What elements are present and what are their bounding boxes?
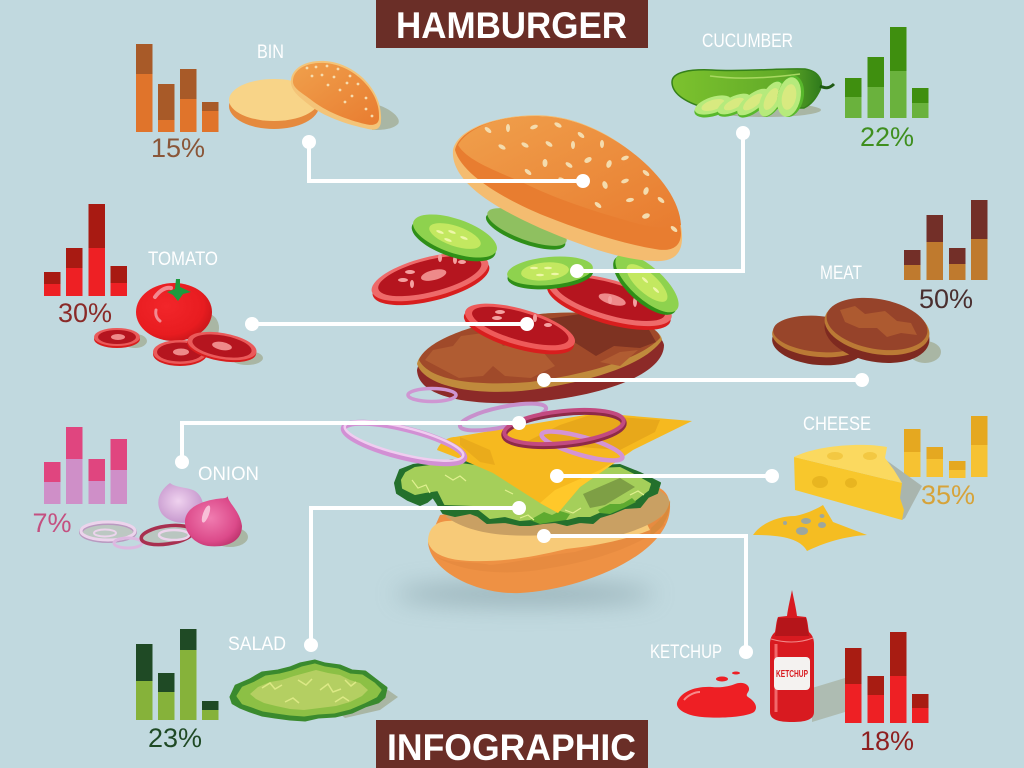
bun bar chart <box>136 44 218 132</box>
tomato percent: 30% <box>58 298 112 328</box>
icon: cucumber with slices <box>672 69 834 123</box>
meat bar chart <box>904 200 988 280</box>
panel: meat <box>770 200 988 371</box>
icon: tomato with slices <box>94 279 263 367</box>
icon: ketchup bottle: KETCHUP <box>776 669 808 680</box>
ketchup bar chart <box>845 632 928 723</box>
icon: ketchup bottle <box>770 590 845 722</box>
tomato slices <box>367 243 677 364</box>
bun percent: 15% <box>151 133 205 163</box>
icon: ketchup puddle <box>677 672 756 718</box>
panel: bun <box>136 42 399 163</box>
ketchup label: KETCHUP <box>650 642 722 663</box>
salad label: SALAD <box>228 634 286 655</box>
title: hamburger: HAMBURGER <box>396 5 627 46</box>
meat percent: 50% <box>919 284 973 314</box>
icon: salad leaf <box>231 661 398 720</box>
connector: bun <box>302 135 590 188</box>
connector: tomato <box>245 317 534 331</box>
icon: onions with rings <box>81 483 248 548</box>
ketchup percent: 18% <box>860 726 914 756</box>
bottom bun <box>428 480 670 593</box>
meat label: MEAT <box>820 263 862 284</box>
onion bar chart <box>44 427 127 504</box>
connector: cucumber <box>570 126 750 278</box>
panel: onion <box>32 427 259 548</box>
connector: salad <box>304 501 526 652</box>
cheese slice <box>437 413 692 513</box>
panel: salad <box>136 629 398 753</box>
top bun <box>453 115 682 261</box>
icon: meat patties <box>770 291 941 371</box>
cucumber percent: 22% <box>860 122 914 152</box>
onion percent: 7% <box>32 508 72 538</box>
burger shadow <box>395 583 655 605</box>
cucumber bar chart <box>845 27 928 118</box>
connector: meat <box>537 373 869 387</box>
meat patty <box>417 313 664 403</box>
onion label: ONION <box>198 464 259 485</box>
lettuce <box>395 460 660 525</box>
salad percent: 23% <box>148 723 202 753</box>
icon: cheese wedge and slice <box>753 445 922 551</box>
panel: tomato <box>44 204 263 367</box>
title: infographic: INFOGRAPHIC <box>387 727 636 768</box>
icon: bun halves <box>229 61 399 130</box>
cheese percent: 35% <box>921 480 975 510</box>
panel: cheese <box>753 414 988 551</box>
tomato bar chart <box>44 204 127 296</box>
exploded hamburger <box>340 115 692 605</box>
cheese bar chart <box>904 416 988 478</box>
connector: cheese <box>550 469 779 483</box>
panel: ketchup <box>650 590 928 756</box>
onion rings <box>340 388 625 472</box>
salad bar chart <box>136 629 218 720</box>
bun label: BIN <box>257 42 284 63</box>
connector: ketchup <box>537 529 753 659</box>
connector: onion <box>175 416 526 469</box>
cheese label: CHEESE <box>803 414 871 435</box>
cucumber slices <box>407 200 687 325</box>
tomato label: TOMATO <box>148 249 218 270</box>
cucumber label: CUCUMBER <box>702 31 793 52</box>
sesame seeds <box>484 121 678 233</box>
panel: cucumber <box>672 27 928 152</box>
